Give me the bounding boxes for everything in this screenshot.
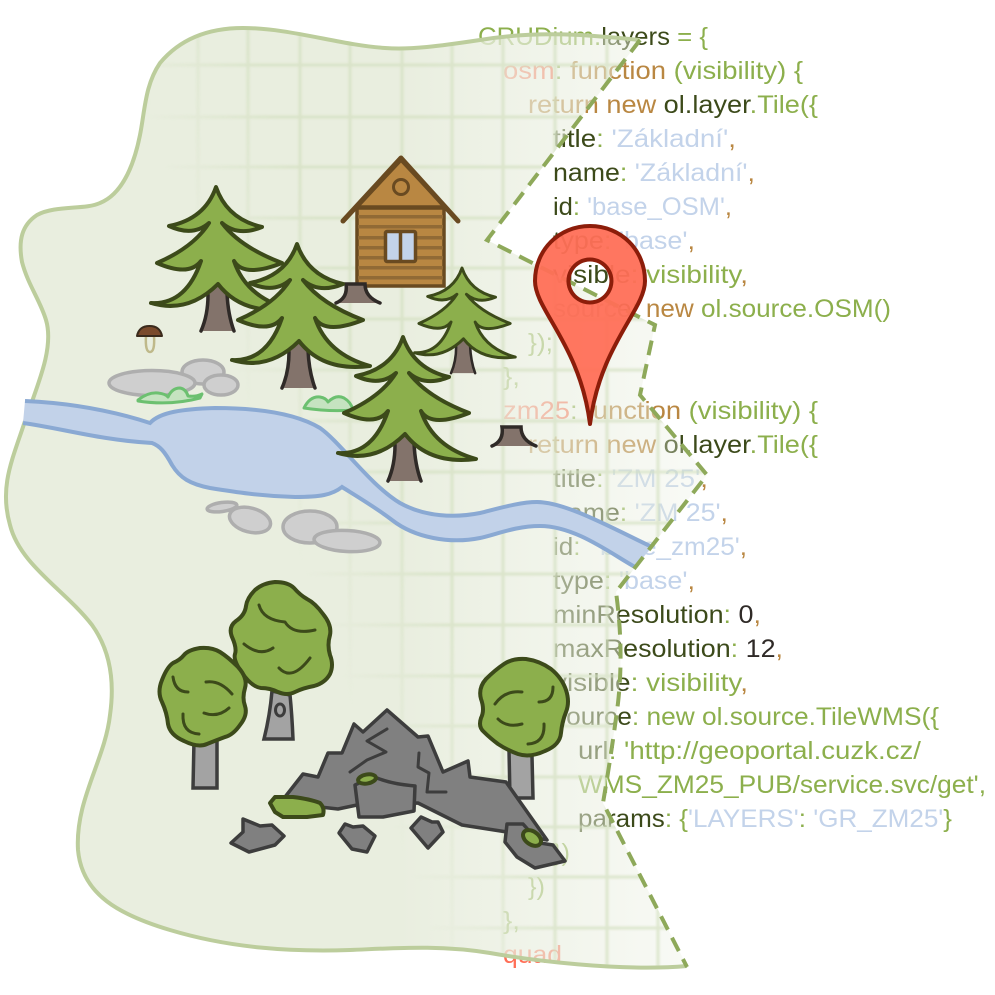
code: osm layer: type: 'base', bbox=[553, 227, 695, 255]
code: zm25 layer: url: 'http://geoportal.cuzk.cz/ bbox=[578, 737, 921, 765]
code: zm25 layer: }) bbox=[528, 873, 545, 901]
code: quad layer: quad bbox=[503, 941, 562, 969]
code: zm25 layer: type: 'base', bbox=[553, 567, 695, 595]
icon: small rock middle bbox=[339, 824, 375, 852]
icon: log cabin bbox=[343, 158, 458, 286]
icon: broadleaf tree right bbox=[480, 659, 568, 798]
icon: broadleaf tree left bbox=[160, 648, 246, 788]
code: osm layer: source: new ol.source.OSM() bbox=[553, 295, 891, 323]
code: osm layer: id: 'base_OSM', bbox=[553, 193, 732, 221]
icon: fir tree 3 bbox=[338, 337, 476, 481]
code: zm25 layer: }, bbox=[503, 907, 520, 935]
map outline bbox=[6, 28, 687, 968]
code: zm25 layer: id: 'base_zm25', bbox=[553, 533, 747, 561]
code: zm25 layer: source: new ol.source.TileWMS({ bbox=[553, 703, 939, 731]
boulders above the lake bbox=[109, 360, 238, 396]
code: osm layer: }, bbox=[503, 363, 520, 391]
code: osm layer: visible : visibility , bbox=[553, 261, 748, 289]
icon: mossy rock bottom right bbox=[505, 824, 565, 868]
code: osm layer: return new ol.layer .Tile({ bbox=[528, 91, 818, 119]
boulders below the lake bbox=[207, 500, 381, 553]
code: zm25 layer: params: {'LAYERS': 'GR_ZM25'} bbox=[578, 805, 952, 833]
icon: tree stump by river bbox=[492, 427, 536, 446]
code: zm25 layer: minResolution : 0, bbox=[553, 601, 761, 629]
code: osm layer: name: 'Základní' , bbox=[553, 159, 755, 187]
code: zm25 layer: title: 'ZM 25' , bbox=[553, 465, 708, 493]
icon: fir tree 1 bbox=[151, 187, 289, 331]
dashed torn edge of map bbox=[487, 40, 707, 967]
code: zm25 layer bbox=[503, 397, 986, 935]
icon: small rock left bbox=[231, 819, 284, 852]
code: CRUDium.layers opening: CRUDium.layers = { bbox=[478, 23, 708, 51]
code: zm25 layer: visible : visibility , bbox=[553, 669, 748, 697]
code: zm25 layer: return new ol.layer .Tile({ bbox=[528, 431, 818, 459]
icon: small rock right bbox=[411, 817, 443, 848]
river and lake bbox=[23, 401, 652, 567]
bush left bbox=[138, 388, 202, 403]
code listing: CRUDium.layers bbox=[478, 23, 986, 969]
code: zm25 layer: zm25: function (visibility) { bbox=[503, 397, 818, 425]
code: zm25 layer: }) bbox=[553, 839, 570, 867]
icon: tree stump by cabin bbox=[336, 284, 380, 303]
icon: rock pile bbox=[270, 710, 547, 840]
icon: broadleaf tree back bbox=[231, 582, 332, 739]
icon: fir tree 2 bbox=[232, 244, 370, 388]
code: osm layer bbox=[503, 57, 891, 391]
icon: mushroom bbox=[137, 326, 162, 352]
map panel: torn paper background bbox=[0, 20, 720, 980]
code: zm25 layer: WMS_ZM25_PUB/service.svc/get', bbox=[578, 771, 986, 799]
code: osm layer: }); bbox=[528, 329, 553, 357]
code: osm layer: osm: function (visibility) { bbox=[503, 57, 803, 85]
icon: map pin bbox=[535, 226, 645, 424]
code: zm25 layer: name: 'ZM 25', bbox=[553, 499, 728, 527]
code: osm layer: title: 'Základní' , bbox=[553, 125, 736, 153]
bush right bbox=[304, 397, 353, 411]
code: zm25 layer: maxResolution : 12, bbox=[553, 635, 783, 663]
icon: small fir tree bbox=[415, 268, 515, 373]
